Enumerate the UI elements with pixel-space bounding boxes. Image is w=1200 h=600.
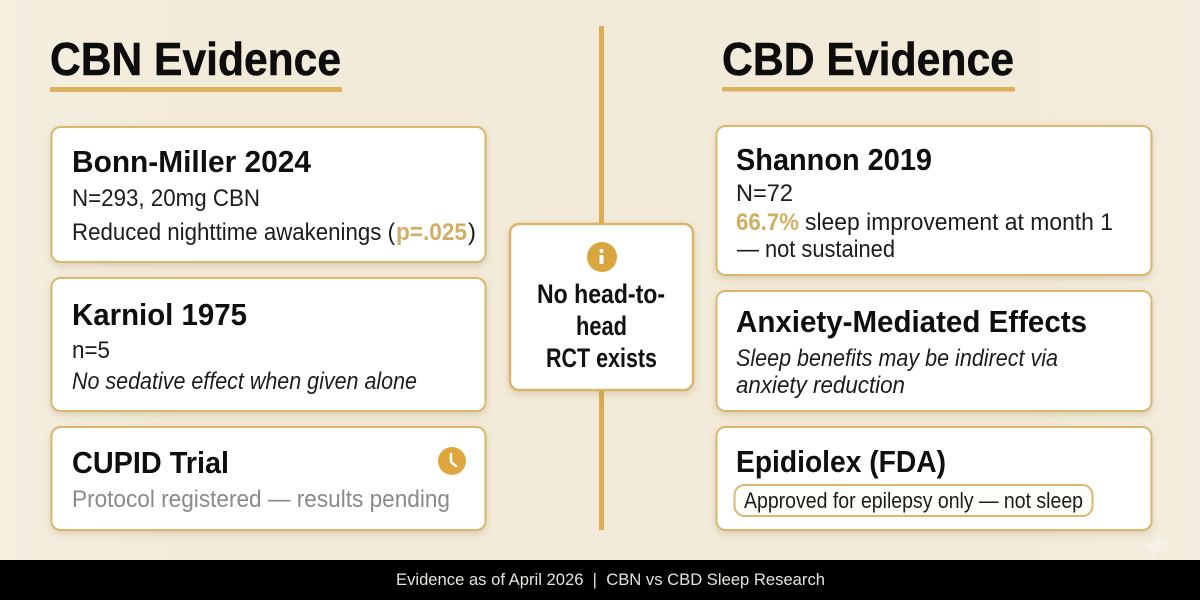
card: CUPID Trial: Protocol registered — results pending: [72, 486, 450, 513]
center divider line: [599, 26, 604, 530]
pill: approved for epilepsy only: Approved for epilepsy only — not sleep: [744, 488, 1083, 513]
card: Bonn-Miller 2024: N=293, 20mg CBN: [72, 185, 260, 212]
card: Shannon 2019: N=72: [736, 180, 793, 207]
card: Anxiety-Mediated Effects: Anxiety-Mediated Effects: [736, 304, 1087, 339]
heading underline: [50, 87, 342, 92]
callout: no head-to-head RCT: [510, 224, 693, 390]
card: Shannon 2019: Shannon 2019: [736, 142, 932, 177]
card: CUPID Trial: [52, 427, 486, 530]
card: Bonn-Miller 2024: ): [468, 219, 476, 246]
icon: clock: [438, 447, 466, 475]
card: Bonn-Miller 2024: Reduced nighttime awakenings (: [72, 219, 395, 246]
card: Karniol 1975: Karniol 1975: [72, 297, 247, 332]
heading underline: [722, 87, 1015, 92]
card: Shannon 2019: — not sustained: [737, 236, 895, 263]
decorative sparkle: [1141, 535, 1174, 560]
panel: CBN evidence column: [50, 33, 486, 530]
footer bar: Evidence as of April 2026 | CBN vs CBD Sleep Research: [396, 570, 825, 589]
card: Bonn-Miller 2024: p=.025: [396, 219, 467, 246]
icon: info: [587, 242, 617, 272]
card: Anxiety-Mediated Effects: anxiety reduction: [736, 372, 905, 399]
card: Bonn-Miller 2024: Bonn-Miller 2024: [72, 144, 312, 179]
card: Anxiety-Mediated Effects: [716, 291, 1152, 411]
card: Shannon 2019: sleep improvement at month 1: [805, 209, 1113, 236]
callout: no head-to-head RCT: RCT exists: [546, 343, 657, 373]
card: Karniol 1975: n=5: [72, 337, 110, 364]
heading: CBD Evidence: CBD Evidence: [722, 33, 1014, 85]
card: Karniol 1975: No sedative effect when given alone: [72, 368, 417, 395]
footer bar: [0, 560, 1200, 600]
heading: CBN Evidence: CBN Evidence: [50, 33, 341, 85]
card: Shannon 2019: [716, 126, 1152, 275]
callout: no head-to-head RCT: head: [576, 311, 627, 341]
card: Epidiolex (FDA): Epidiolex (FDA): [736, 444, 946, 479]
card: CUPID Trial: CUPID Trial: [72, 445, 229, 480]
card: Bonn-Miller 2024: [52, 127, 486, 262]
card: Anxiety-Mediated Effects: Sleep benefits may be indirect via: [736, 345, 1058, 372]
callout: no head-to-head RCT: No head-to-: [537, 279, 665, 309]
panel: CBD evidence column: [716, 33, 1152, 530]
card: Karniol 1975: [52, 278, 486, 411]
card: Shannon 2019: 66.7%: [736, 209, 799, 236]
card: Epidiolex (FDA): [716, 427, 1152, 530]
